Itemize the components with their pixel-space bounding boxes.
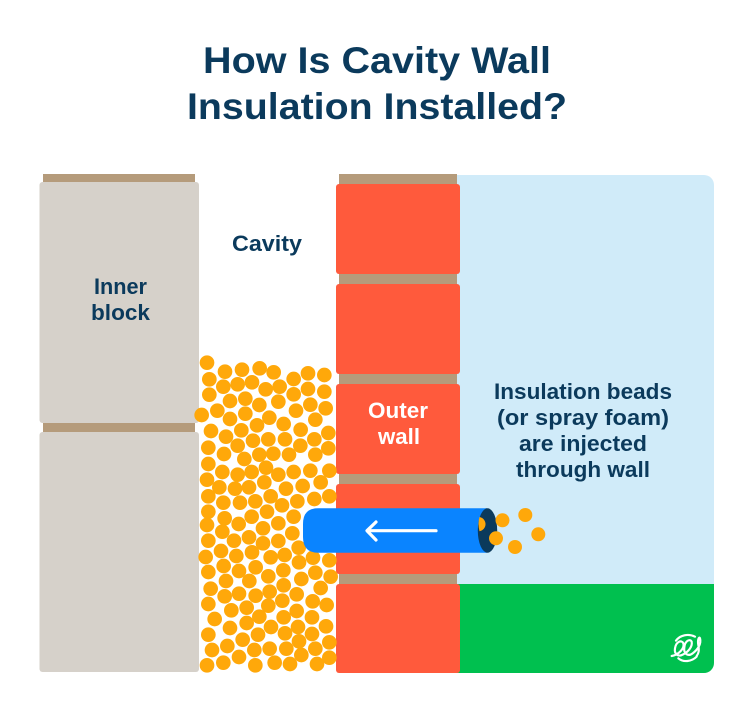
label: inner block: Inner bbox=[94, 274, 147, 299]
label: inner block bbox=[91, 274, 151, 325]
text block: insulation beads description: are injected bbox=[519, 431, 647, 456]
panel: outside sky and grass bbox=[455, 175, 714, 673]
panel: inner block wall bbox=[40, 174, 199, 672]
panel: outer brick wall bbox=[336, 174, 460, 673]
title: Insulation Installed? bbox=[187, 86, 567, 127]
title: How Is Cavity Wall bbox=[203, 40, 551, 81]
injection tube with arrow and escaping beads bbox=[303, 508, 545, 554]
insulation beads filling the cavity bbox=[194, 355, 338, 673]
label: cavity: Cavity bbox=[232, 231, 303, 256]
text block: insulation beads description: Insulation beads bbox=[494, 379, 672, 404]
text block: insulation beads description: (or spray foam) bbox=[497, 405, 669, 430]
text block: insulation beads description: through wall bbox=[516, 457, 650, 482]
label: outer wall: Outer bbox=[368, 398, 428, 423]
icon: logo bbox=[672, 635, 700, 661]
title bbox=[187, 40, 567, 127]
label: inner block: block bbox=[91, 300, 151, 325]
text block: insulation beads description bbox=[494, 379, 672, 482]
label: outer wall: wall bbox=[377, 424, 420, 449]
label: outer wall bbox=[368, 398, 428, 449]
